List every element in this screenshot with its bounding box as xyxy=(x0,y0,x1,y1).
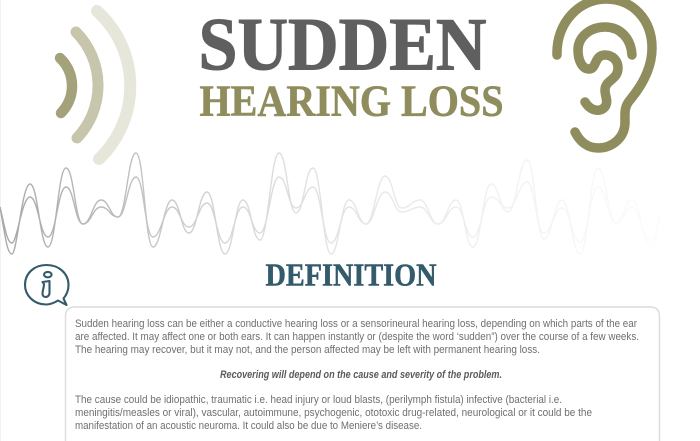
icon: sound waves xyxy=(60,11,130,159)
text block: intro paragraph: Sudden hearing loss can be either a conductive hearing loss or a sensorineural hearing loss, depending on which parts of the ear xyxy=(75,318,637,330)
heading: definition: DEFINITION xyxy=(266,256,436,292)
text block: causes paragraph: meningitis/measles or viral), vascular, autoimmune, psychogenic, ototoxic drug-related, neurological or it could be the xyxy=(75,407,592,419)
icon: ear xyxy=(557,0,652,148)
title xyxy=(198,4,504,126)
title: HEARING LOSS xyxy=(200,76,504,126)
title: SUDDEN xyxy=(198,4,486,86)
text block: causes paragraph: manifestation of an acoustic neuroma. It could also be due to Meniere’s disease. xyxy=(75,420,422,432)
text block: intro paragraph: are affected. It may affect one or both ears. It can happen instantly or (despite the word ‘sudden”) over the course of a few weeks. xyxy=(75,331,639,343)
icon: info speech bubble xyxy=(25,265,68,305)
text block: causes paragraph: The cause could be idiopathic, traumatic i.e. head injury or loud blasts, (perilymph fistula) infective (bacterial i.e. xyxy=(75,394,562,406)
text block: recovery note: Recovering will depend on the cause and severity of the problem. xyxy=(220,369,502,381)
waveform xyxy=(0,153,660,254)
panel: definition xyxy=(66,307,660,441)
text block: intro paragraph: The hearing may recover, but it may not, and the person affected may be left with permanent hearing loss. xyxy=(75,344,540,356)
text block: intro paragraph xyxy=(75,318,639,356)
text block: causes paragraph xyxy=(75,394,592,432)
